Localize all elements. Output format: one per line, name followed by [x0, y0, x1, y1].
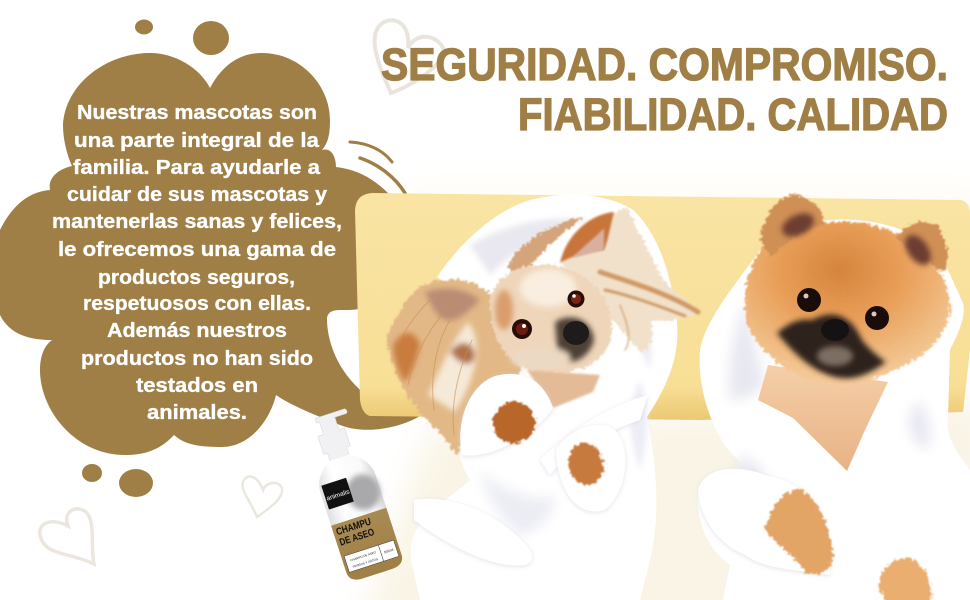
- yellow towel: [355, 193, 970, 420]
- left dog robe lapel: [540, 395, 648, 475]
- bubble text: Nuestras mascotas son: [77, 102, 317, 124]
- bottle title: CHAMPU: [335, 517, 373, 538]
- left dog paw 2: [564, 439, 608, 489]
- bottle logo: animalis: [326, 488, 351, 503]
- left dog sleeve 2: [556, 425, 625, 512]
- left dog robe: [410, 195, 677, 600]
- right dog: [698, 195, 970, 600]
- bottle photo: [342, 470, 385, 514]
- right dog left ear: [760, 195, 823, 258]
- bubble text: una parte integral de la: [74, 130, 320, 152]
- bubble text: testados en: [136, 375, 258, 397]
- bottle info boxes: CHAMPÚ DE ASEO: [349, 549, 377, 562]
- decorative heart: middle: [242, 476, 282, 517]
- right dog muzzle highlight: [817, 346, 853, 366]
- right dog chest: [758, 365, 888, 471]
- bottle pump: [312, 408, 361, 464]
- bottle title: [335, 516, 376, 549]
- right dog eyes: [797, 288, 889, 330]
- bubble text: productos no han sido: [81, 348, 313, 370]
- right dog robe shadows: [729, 300, 930, 490]
- bottle info boxes: PERROS Y GATOS: [352, 557, 379, 569]
- bubble text: mantenerlas sanas y felices,: [52, 211, 342, 233]
- bubble text: animales.: [147, 402, 247, 424]
- heading: [381, 39, 948, 140]
- shampoo bottle: [298, 406, 405, 583]
- right dog nose: [821, 319, 849, 341]
- right dog paw 1: [765, 490, 833, 574]
- bottle title: DE ASEO: [338, 527, 376, 549]
- right dog robe: [698, 220, 970, 600]
- left dog sleeve 1: [460, 374, 553, 456]
- left dog face: [490, 265, 612, 373]
- left dog ear details: [393, 289, 480, 412]
- bottle info boxes: [344, 540, 399, 572]
- bubble dots: [82, 20, 229, 497]
- right dog right ear inner: [900, 230, 936, 270]
- left dog belt: [414, 499, 532, 566]
- right dog left ear inner: [778, 209, 818, 241]
- motion arcs: [350, 142, 405, 193]
- right dog sleeve: [698, 469, 830, 575]
- left dog hair: right side strands: [562, 207, 698, 352]
- bubble text: [52, 102, 342, 424]
- bottle label: [331, 508, 405, 583]
- bubble text: cuidar de sus mascotas y: [67, 184, 328, 206]
- left dog top ear: [560, 212, 614, 263]
- thought bubble: [0, 53, 420, 455]
- left dog: [387, 195, 698, 600]
- left dog face marks: [495, 269, 594, 369]
- fleece floor: [360, 190, 970, 600]
- bubble text: familia. Para ayudarle a: [73, 157, 321, 179]
- right dog paw 2: [879, 558, 931, 600]
- right dog muzzle: [777, 315, 886, 378]
- decorative heart: bottom left: [40, 509, 94, 564]
- bubble text: Además nuestros: [107, 320, 287, 342]
- left dog ear strands: [395, 300, 472, 435]
- left dog long strands: [600, 272, 698, 350]
- bubble text: le ofrecemos una gama de: [58, 239, 336, 261]
- bottle info boxes: 500ml: [384, 548, 394, 555]
- left dog eyes: [512, 290, 584, 339]
- right dog head: [745, 222, 950, 383]
- bottle body: [312, 449, 405, 583]
- left dog braid: [508, 217, 582, 278]
- bubble text: respetuosos con ellas.: [83, 293, 311, 315]
- left dog inner ear: [572, 228, 604, 258]
- left dog paw 1: [493, 401, 535, 443]
- left dog chest: [527, 370, 600, 408]
- bottle logo: [321, 478, 354, 510]
- bubble text: productos seguros,: [98, 267, 295, 289]
- left dog nose: [563, 321, 589, 345]
- decorative heart: top: [375, 20, 444, 93]
- right dog right ear: [897, 222, 947, 272]
- left dog hair: left ear: [387, 279, 521, 455]
